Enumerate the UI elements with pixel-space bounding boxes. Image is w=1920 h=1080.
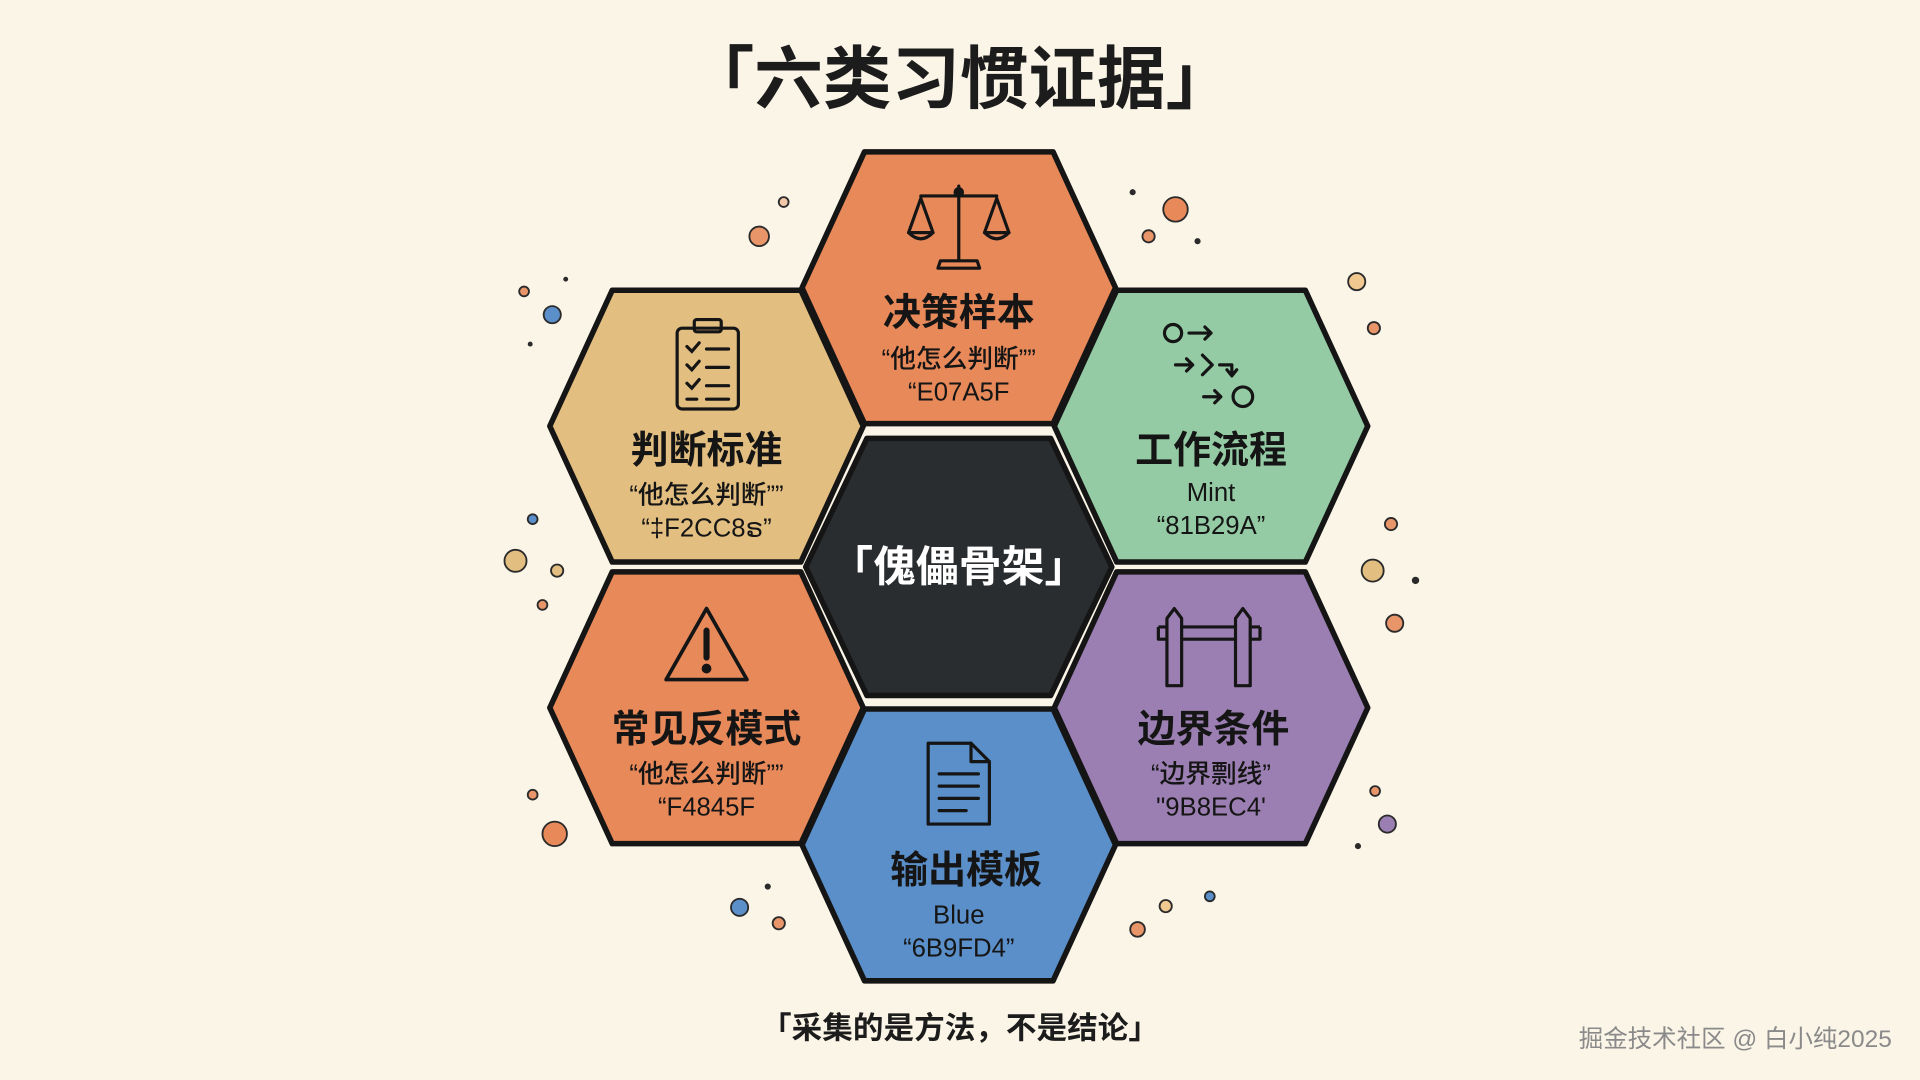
panel: 常见反模式: “他怎么判断”” <box>629 759 784 788</box>
panel: 常见反模式: “F4845F <box>658 794 755 822</box>
watermark: 掘金技术社区 @ 白小纯2025 <box>1579 1025 1892 1053</box>
panel: 判断标准: “‡F2CC8ຣ” <box>641 514 772 542</box>
panel: 边界条件 <box>1054 572 1368 844</box>
panel: 输出模板: “6B9FD4” <box>903 934 1014 962</box>
panel: 边界条件: “边界剽线” <box>1151 759 1271 788</box>
panel: 常见反模式: 常见反模式 <box>612 709 801 751</box>
panel: 决策样本 <box>802 152 1116 424</box>
icon: fence boundary <box>1158 609 1260 686</box>
panel: 判断标准: “他怎么判断”” <box>629 480 784 509</box>
panel: 判断标准 <box>550 290 863 562</box>
panel: 决策样本: “他怎么判断”” <box>882 344 1036 373</box>
decorative dots <box>504 197 1403 937</box>
icon: document <box>928 743 989 824</box>
panel: center 傀儡骨架: 「傀儡骨架」 <box>830 544 1087 592</box>
footer caption: 「采集的是方法，不是结论」 <box>761 1011 1159 1045</box>
panel: 工作流程: 工作流程 <box>1135 430 1287 472</box>
icon: workflow arrows <box>1164 324 1253 407</box>
icon: warning triangle <box>666 609 747 680</box>
panel: 工作流程: Mint <box>1187 479 1235 507</box>
panel: 常见反模式 <box>550 572 863 844</box>
icon: scales <box>909 186 1009 268</box>
panel: center 傀儡骨架 <box>806 438 1112 696</box>
panel: 判断标准: 判断标准 <box>631 430 782 472</box>
panel: 决策样本: 决策样本 <box>883 293 1035 335</box>
panel: 边界条件: 边界条件 <box>1138 709 1289 751</box>
panel: 工作流程 <box>1054 290 1368 562</box>
icon: clipboard checklist <box>677 320 738 409</box>
panel: 输出模板: 输出模板 <box>890 850 1042 892</box>
panel: 输出模板 <box>802 709 1116 981</box>
panel: 决策样本: “E07A5F <box>908 378 1009 406</box>
panel: 边界条件: "9B8EC4' <box>1156 794 1266 822</box>
panel: 输出模板: Blue <box>933 901 985 929</box>
panel: 工作流程: “81B29A” <box>1157 512 1265 540</box>
title: 「六类习惯证据」 <box>686 41 1234 118</box>
